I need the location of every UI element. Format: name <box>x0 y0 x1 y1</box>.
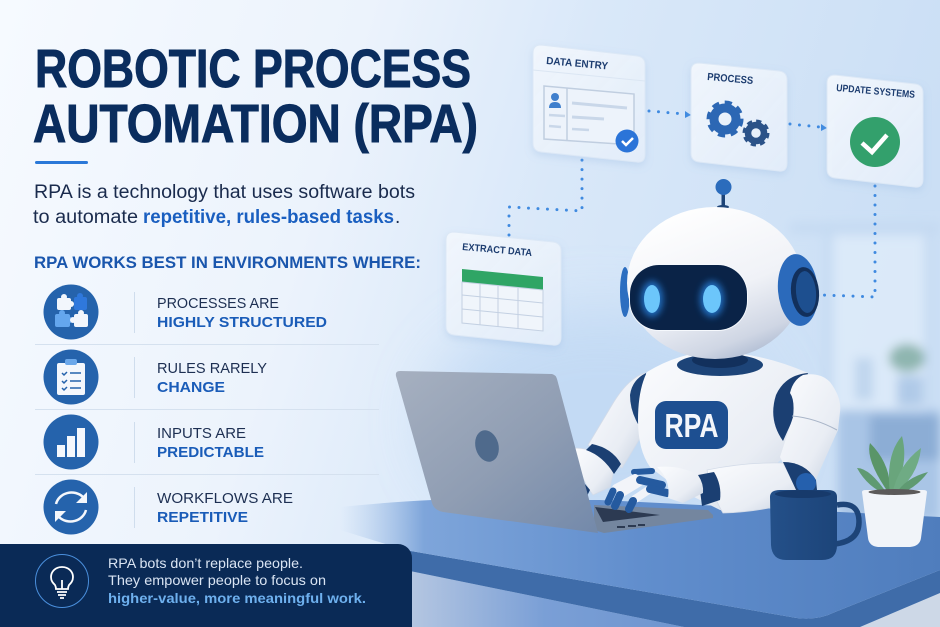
icon: clipboard <box>44 350 98 404</box>
icon: green check <box>850 117 900 167</box>
potted plant <box>857 436 928 547</box>
check badge <box>616 130 638 152</box>
intro text: . <box>395 207 400 228</box>
palm <box>657 467 703 503</box>
row separator <box>35 409 379 410</box>
left upper arm <box>588 373 646 468</box>
visor <box>629 264 748 331</box>
callout text: They empower people to focus on <box>108 572 326 588</box>
card: update systems: UPDATE SYSTEMS <box>836 83 916 101</box>
row: workflows repetitive <box>44 480 293 534</box>
label <box>157 490 293 526</box>
connector arrowheads <box>685 111 827 131</box>
title accent rule <box>35 161 88 164</box>
robot right hand <box>608 467 720 509</box>
label: RULES RARELY <box>157 360 267 377</box>
icon: light bulb <box>36 554 88 608</box>
right forearm <box>707 463 797 513</box>
label: REPETITIVE <box>157 509 248 526</box>
card: extract data <box>446 232 561 345</box>
fingers <box>608 471 667 509</box>
desk <box>340 500 940 627</box>
callout text: RPA bots don’t replace people. <box>108 555 303 571</box>
laptop base <box>594 505 713 533</box>
antenna <box>716 179 732 209</box>
divider <box>134 292 135 333</box>
form <box>544 86 634 145</box>
label <box>157 425 264 461</box>
coffee mug <box>770 490 859 560</box>
blurred office background <box>790 222 940 520</box>
label: PROCESSES ARE <box>157 295 279 312</box>
callout text: higher-value, more meaningful work. <box>108 590 366 606</box>
icon: puzzle <box>44 284 98 340</box>
head <box>620 207 821 359</box>
label: INPUTS ARE <box>157 425 246 442</box>
card: data entry: DATA ENTRY <box>546 55 609 72</box>
label <box>157 360 267 396</box>
icon: refresh arrows <box>44 480 98 534</box>
dotted connectors <box>509 111 875 297</box>
divider <box>134 487 135 528</box>
callout text <box>108 555 366 606</box>
divider <box>134 357 135 398</box>
row: rules rarely change <box>44 350 267 404</box>
soft background glow <box>430 310 770 530</box>
robot <box>588 179 840 513</box>
list: conditions <box>35 284 379 534</box>
intro text: repetitive, rules-based tasks <box>143 207 394 228</box>
robot left forearm <box>575 444 621 498</box>
callout: bottom banner <box>0 544 412 627</box>
intro text <box>33 182 415 228</box>
section heading: RPA WORKS BEST IN ENVIRONMENTS WHERE: <box>34 254 421 272</box>
row: inputs predictable <box>44 414 264 470</box>
ear <box>775 252 821 328</box>
torso <box>638 352 808 511</box>
spreadsheet <box>462 269 543 331</box>
laptop lid <box>396 371 598 533</box>
title <box>33 39 478 154</box>
icon: bar chart <box>44 414 98 470</box>
divider <box>134 422 135 463</box>
label: WORKFLOWS ARE <box>157 490 293 507</box>
label: HIGHLY STRUCTURED <box>157 314 327 331</box>
card: process: PROCESS <box>707 71 754 87</box>
card: extract data: EXTRACT DATA <box>462 242 532 259</box>
label: PREDICTABLE <box>157 444 264 461</box>
intro text: RPA is a technology that uses software bots <box>34 182 415 203</box>
icon: gears <box>709 103 768 144</box>
card: data entry <box>533 45 645 162</box>
wrist <box>698 472 720 506</box>
neck <box>677 352 763 376</box>
label: CHANGE <box>157 379 225 396</box>
intro text: to automate <box>33 207 138 228</box>
row: highly structured <box>44 284 327 340</box>
row separator <box>35 344 379 345</box>
right shoulder and arm <box>707 373 840 513</box>
title: ROBOTIC PROCESS <box>35 39 471 99</box>
card: process <box>691 63 787 171</box>
chest badge <box>655 401 728 449</box>
chest badge: RPA <box>664 407 718 444</box>
card: update systems <box>827 75 923 187</box>
right elbow joint <box>783 462 817 492</box>
laptop logo <box>472 428 502 464</box>
label <box>157 295 327 331</box>
row separator <box>35 474 379 475</box>
leaves <box>857 436 928 495</box>
title: AUTOMATION (RPA) <box>33 94 478 154</box>
